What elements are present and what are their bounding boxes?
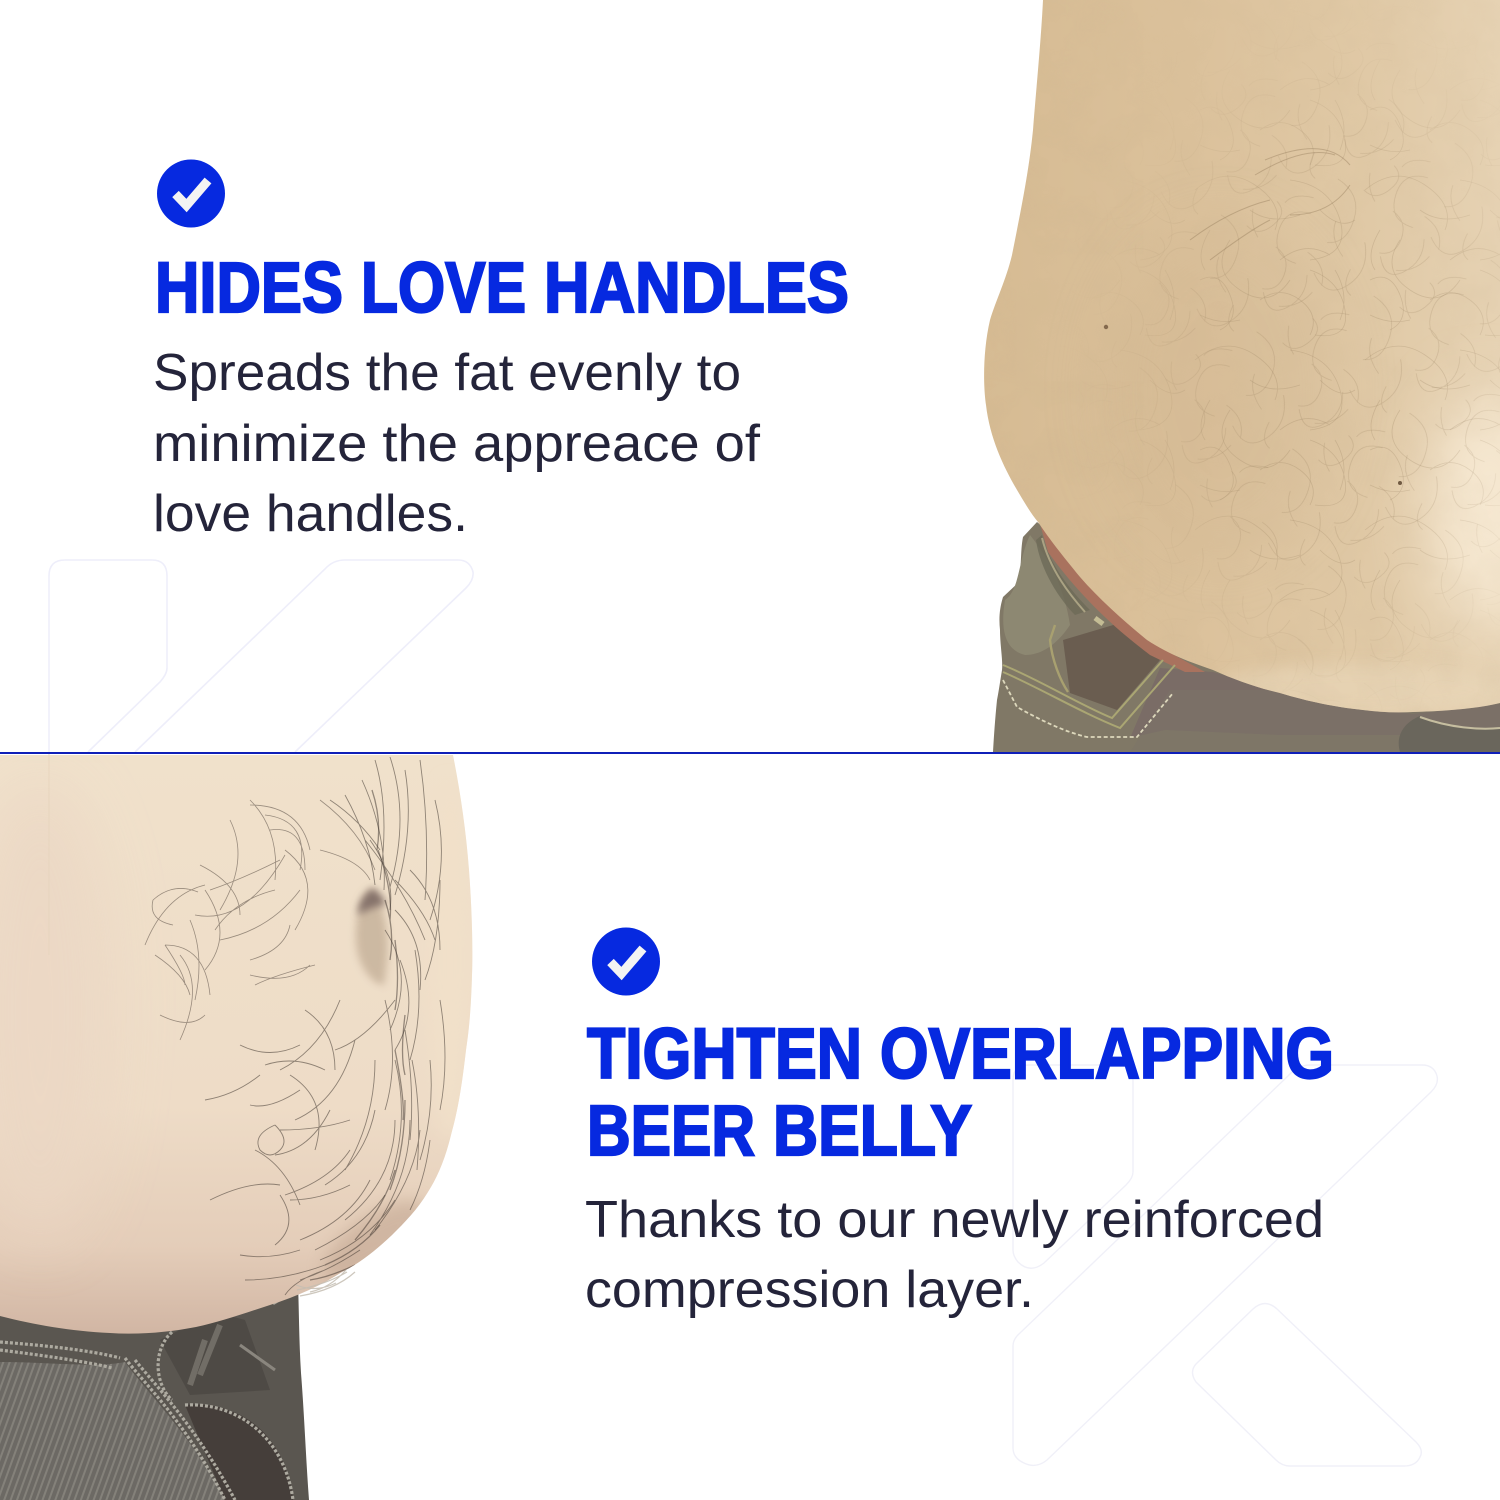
skin: [980, 0, 1500, 752]
watermark: bottom K logo outline: [1013, 1065, 1437, 1466]
heading: tighten overlapping beer belly: [587, 1015, 1334, 1171]
heading: hides love handles: HANDLES: [544, 249, 849, 328]
heading: tighten overlapping beer belly: BEER: [587, 1092, 755, 1171]
jeans at waist: [993, 522, 1500, 752]
text block: compression description: [585, 1191, 1324, 1319]
text block: compression description: compression layer.: [585, 1261, 1034, 1319]
text block: compression description: Thanks to our newly reinforced: [585, 1191, 1324, 1249]
text block: love handles description: Spreads the fat evenly to: [153, 344, 741, 402]
heading: tighten overlapping beer belly: BELLY: [773, 1092, 972, 1171]
watermark trace over belly photo: [48, 754, 50, 955]
photo: side view of torso with love handles: [980, 0, 1500, 752]
heading: hides love handles: HIDES: [155, 249, 343, 328]
icon: check badge: [592, 928, 660, 996]
skin: [0, 755, 480, 1340]
photo: front view of belly with navel: [0, 755, 480, 1500]
heading: tighten overlapping beer belly: TIGHTEN: [587, 1015, 862, 1094]
jeans below belly: [0, 1283, 309, 1500]
blue divider line: [0, 752, 1500, 754]
heading: hides love handles: [155, 249, 849, 328]
body hair: [1142, 78, 1500, 676]
text block: love handles description: minimize the appreace of: [153, 415, 761, 473]
section: tighten overlapping beer belly: [585, 928, 1334, 1319]
fine hair at belly underside: [296, 1270, 355, 1296]
icon: check badge: [157, 160, 225, 228]
text block: love handles description: love handles.: [153, 485, 468, 543]
section: hides love handles: [153, 160, 849, 543]
watermark: top K logo outline: [49, 560, 473, 752]
heading: hides love handles: LOVE: [361, 249, 526, 328]
heading: tighten overlapping beer belly: OVERLAPPING: [880, 1015, 1334, 1094]
text block: love handles description: [153, 344, 761, 543]
dark body hair: [145, 800, 375, 1040]
